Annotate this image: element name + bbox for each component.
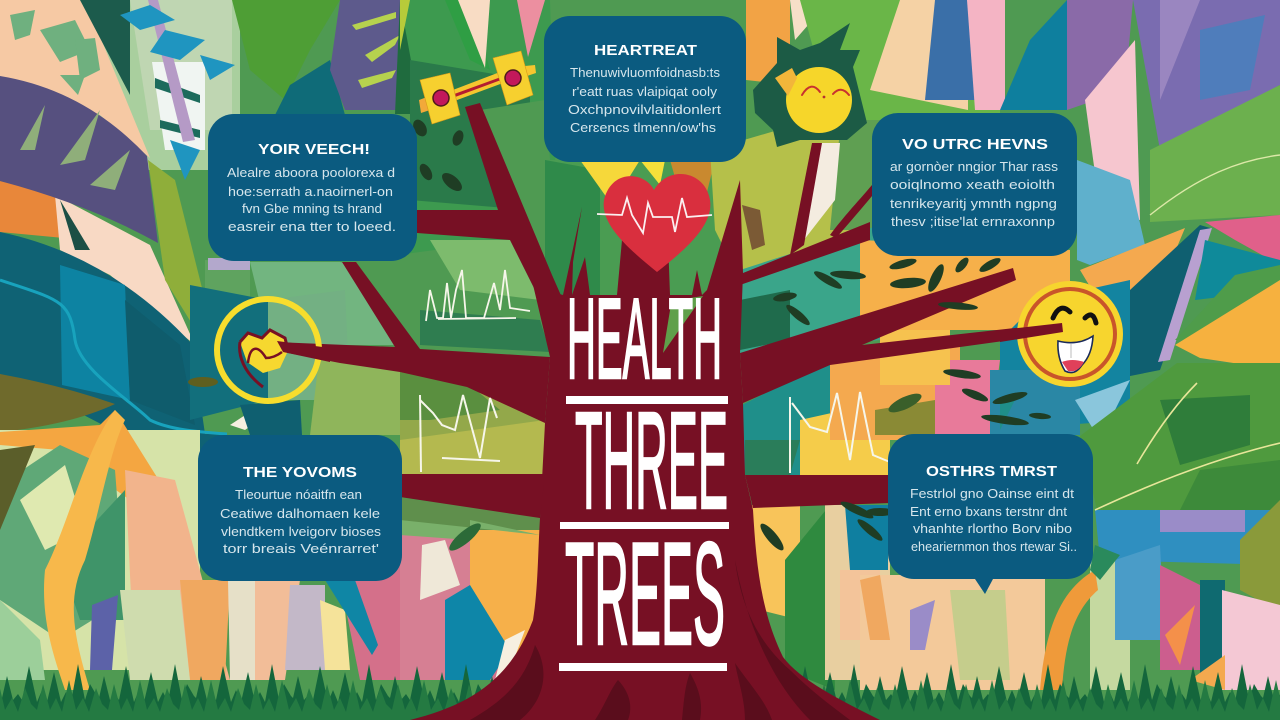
body text: r'eatt ruas vlaipiqat ooly [572,85,718,99]
panel: right top [872,113,1077,256]
body text: Oxchpnovilvlaitidonlert [568,103,722,117]
body text: torr breais Veénrarret' [223,542,379,556]
heading: OSTHRS TMRST [926,463,1057,480]
heading: VO UTRC HEVNS [902,136,1048,153]
infographic canvas: THREE [575,384,728,538]
body text: Thenuwivluomfoidnasb:ts [570,66,720,80]
body text: vlendtkem lveigorv bioses [221,525,381,539]
green gap in trunk [663,296,703,353]
body text [910,487,1077,554]
body text: ar gornòer nngior Thar rass [890,160,1058,174]
body text: Ceatiwe dalhomaen kele [220,507,380,521]
body text: Festrlol gno Oainse eint dt [910,487,1075,501]
icon: smiling leaf face [753,23,867,147]
icon: heartbeat heart [597,174,712,272]
heading: THE YOVOMS [243,464,357,481]
chart line: upper left [426,270,530,321]
panel: left top [208,114,417,261]
grass [0,660,1280,720]
panel: heartbeat [544,16,746,162]
infographic canvas: TREES [565,512,725,675]
panel: left bottom [198,435,402,581]
heading: HEARTREAT [594,42,697,59]
chart line: lower right [790,392,890,473]
body text: Ent erno bxans terstnr dnt [910,505,1068,519]
tree trunk and branches [275,103,1061,720]
body text: thesv ;itise'lat ernraxonnp [891,215,1055,229]
body text: fvn Gbe mning ts hrand [242,202,382,216]
body text: easreir ena tter to loeed. [228,220,396,234]
root shading [470,560,850,720]
body text: eheariernmon thos rtewar Si.. [911,540,1077,554]
infographic canvas: HEALTH [567,276,722,403]
panel: right bottom [888,434,1093,594]
body text: ooiqlnomo xeath eoiolth [890,178,1055,192]
body text: Alealre aboora poolorexa d [227,166,395,180]
body text: Cerɛencs tlmenn/ow'hs [570,121,716,135]
leaves [188,117,1051,554]
icon: dumbbell [419,51,536,124]
icon: yellow ring with heart [217,299,330,401]
body text [890,160,1058,229]
chart line: lower left [420,395,500,472]
body text: hoe:serrath a.naoirnerl-on [228,185,393,199]
body text: Tleourtue nóaitfn ean [235,488,362,502]
body text [568,66,722,135]
body text: tenrikeyaritj ymnth ngpng [890,197,1057,211]
body text [227,166,396,234]
body text [220,488,381,556]
icon: laughing emoji [1000,281,1123,387]
heading: YOIR VEECH! [258,141,370,158]
body text: vhanhte rlortho Borv nibo [913,522,1072,536]
title [559,276,729,675]
